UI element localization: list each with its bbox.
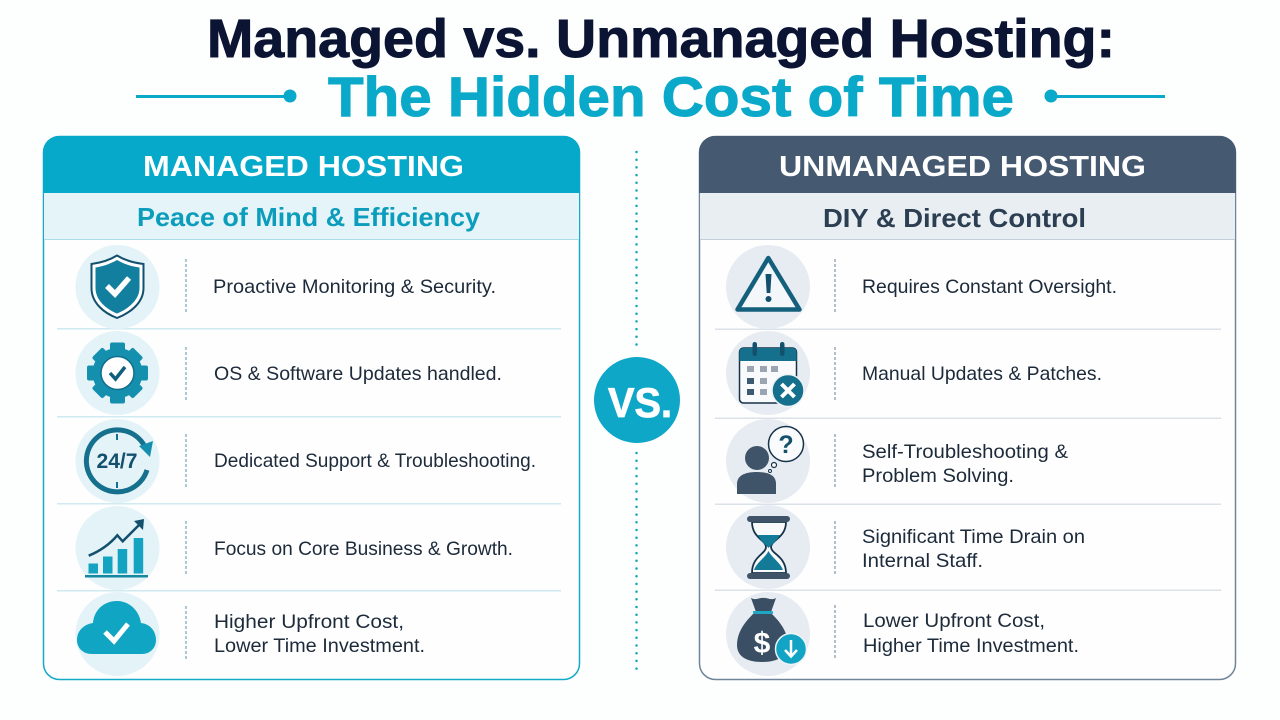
row: dedicated support bbox=[76, 419, 536, 503]
icon: person with question: ? bbox=[778, 431, 794, 459]
unmanaged subheader: DIY & Direct Control bbox=[823, 203, 1086, 233]
row: core business bbox=[76, 506, 513, 590]
title bbox=[207, 9, 1115, 128]
icon: warning triangle bbox=[738, 258, 800, 310]
icon: shield bbox=[92, 256, 144, 318]
row: constant oversight bbox=[726, 245, 1117, 329]
icon: money bag: $ bbox=[754, 627, 771, 660]
row: time drain bbox=[726, 505, 1085, 589]
row: proactive monitoring: Proactive Monitoring & Security. bbox=[213, 276, 496, 298]
row: constant oversight: Requires Constant Oversight. bbox=[862, 276, 1117, 298]
row: self-troubleshooting: Self-Troubleshooting & bbox=[862, 441, 1068, 463]
icon: gear bbox=[87, 342, 148, 404]
row: lower cost bbox=[726, 592, 1079, 676]
unmanaged subheader bbox=[700, 193, 1235, 240]
row: time drain: Internal Staff. bbox=[862, 550, 983, 572]
unmanaged header bbox=[699, 136, 1236, 193]
row: manual updates: Manual Updates & Patches. bbox=[862, 363, 1102, 385]
icon: growth chart bbox=[85, 519, 148, 578]
vs badge bbox=[594, 357, 680, 443]
icon: cloud check bbox=[77, 601, 156, 654]
managed subheader bbox=[44, 193, 579, 240]
icon: calendar bbox=[740, 342, 804, 406]
icon: hourglass bbox=[747, 516, 790, 579]
icon: 24/7 clock bbox=[86, 430, 153, 492]
panel: managed hosting bbox=[43, 136, 580, 680]
row: proactive monitoring bbox=[76, 245, 496, 329]
title: Managed vs. Unmanaged Hosting: bbox=[207, 9, 1115, 69]
icon: 24/7 clock: 24/7 bbox=[96, 450, 138, 473]
row: core business: Focus on Core Business & Growth. bbox=[214, 538, 513, 560]
managed header bbox=[43, 136, 580, 193]
row: updates handled bbox=[76, 331, 502, 415]
unmanaged header: UNMANAGED HOSTING bbox=[779, 151, 1146, 183]
title: The Hidden Cost of Time bbox=[328, 65, 1014, 128]
row: lower cost: Higher Time Investment. bbox=[863, 635, 1079, 657]
vs badge: VS. bbox=[608, 379, 672, 426]
row: cost and time: Higher Upfront Cost, bbox=[214, 611, 404, 633]
managed header: MANAGED HOSTING bbox=[143, 151, 464, 183]
row: time drain: Significant Time Drain on bbox=[862, 526, 1085, 548]
row: manual updates bbox=[726, 331, 1102, 415]
managed subheader: Peace of Mind & Efficiency bbox=[137, 202, 481, 232]
title accent: left line bbox=[136, 90, 296, 102]
panel: unmanaged hosting bbox=[699, 136, 1236, 680]
row: cost and time: Lower Time Investment. bbox=[214, 635, 425, 657]
row: self-troubleshooting bbox=[726, 419, 1068, 503]
icon: person with question bbox=[737, 426, 804, 494]
icon: money bag bbox=[737, 598, 806, 664]
center divider bbox=[635, 152, 638, 672]
row: updates handled: OS & Software Updates handled. bbox=[214, 363, 502, 385]
row: dedicated support: Dedicated Support & Troubleshooting. bbox=[214, 450, 536, 472]
row: lower cost: Lower Upfront Cost, bbox=[863, 610, 1045, 632]
title accent: right line bbox=[1044, 90, 1165, 102]
row: self-troubleshooting: Problem Solving. bbox=[862, 465, 1014, 487]
row: cost and time bbox=[76, 592, 425, 676]
